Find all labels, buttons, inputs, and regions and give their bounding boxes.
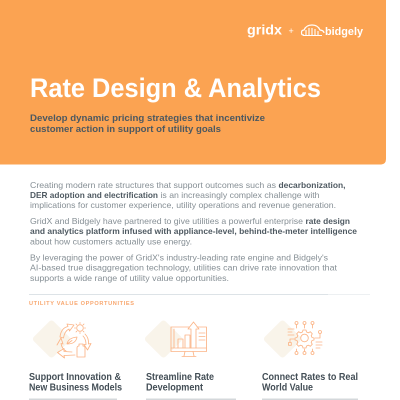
text block: paragraph 1: Creating modern rate structures that support outcomes such as [30, 180, 276, 190]
text block: paragraph 3: By leveraging the power of GridX's industry-leading rate engine and Bidgely's [30, 252, 328, 262]
text block: paragraph 3: AI-based true disaggregation technology, utilities can drive rate innovation that [30, 262, 338, 272]
panel: column 1 [29, 319, 122, 394]
subtitle: customer action in support of utility goals [30, 124, 221, 134]
text block: paragraph 2: rate design [306, 216, 350, 226]
heading: Support Innovation & [29, 372, 121, 383]
icon: gear with circuit nodes [288, 322, 322, 354]
subtitle [30, 113, 265, 134]
text block: paragraph 3: supports a wide range of utility value opportunities. [30, 273, 229, 283]
text block: paragraph 1 [30, 180, 346, 210]
text block: paragraph 1: DER adoption and electrification [30, 190, 158, 200]
subtitle: Develop dynamic pricing strategies that incentivize [30, 113, 265, 123]
heading [29, 372, 122, 394]
heading: New Business Models [29, 382, 122, 394]
heading: Connect Rates to Real [262, 372, 358, 383]
section label: UTILITY VALUE OPPORTUNITIES [29, 301, 134, 307]
text block: paragraph 1: is an increasingly complex challenge with [160, 190, 320, 200]
diamond background 3 [263, 319, 302, 359]
text block: paragraph 2 [30, 216, 357, 246]
heading: World Value [262, 382, 313, 394]
heading: Development [146, 382, 203, 394]
heading: Streamline Rate [146, 372, 214, 383]
logo: gridX: gridx [247, 22, 282, 38]
icon: sustainability cycle [57, 322, 91, 358]
text block: paragraph 2: GridX and Bidgely have partnered to give utilities a powerful enterprise [30, 216, 303, 226]
clipped body text tops at the page edge [29, 398, 358, 400]
text block: paragraph 3 [30, 252, 338, 283]
heading [262, 372, 358, 394]
diamond background 1 [32, 319, 71, 359]
heading [146, 372, 214, 394]
text block: paragraph 1: decarbonization, [278, 180, 346, 190]
icon: monitor with rising chart [171, 322, 206, 356]
panel: orange header [0, 0, 386, 164]
logo plus sign: + [288, 26, 294, 36]
title: Rate Design & Analytics [30, 73, 321, 103]
text block: paragraph 1: implications for customer experience, utility operations and revenue generation. [30, 200, 336, 210]
panel: column 3 [262, 319, 358, 394]
text block: paragraph 2: and analytics platform infused with appliance-level, behind-the-meter intelligence [30, 226, 357, 236]
panel: column 2 [144, 319, 214, 394]
text block: paragraph 2: about how customers actually use energy. [30, 236, 192, 246]
diamond background 2 [144, 319, 183, 359]
logo: Bidgely: bidgely [325, 26, 364, 38]
logo: Bidgely [302, 25, 364, 38]
